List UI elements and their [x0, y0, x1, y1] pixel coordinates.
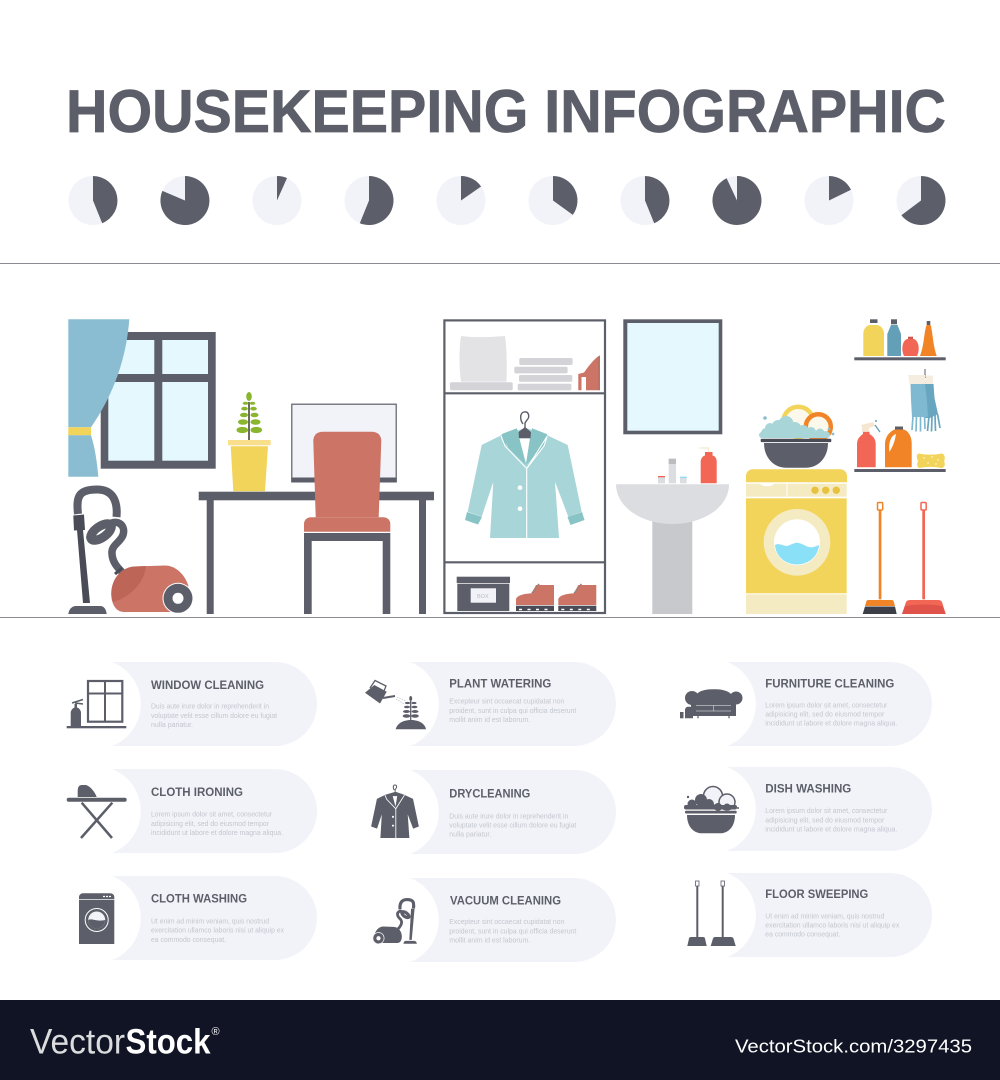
logo: ®	[212, 1026, 220, 1038]
card: vacuum cleaning	[373, 878, 616, 962]
body text: nulla pariatur.	[449, 830, 491, 839]
bathroom mirror	[623, 319, 722, 434]
heading: FLOOR SWEEPING	[765, 887, 868, 901]
shelf with bottles	[854, 319, 946, 360]
pie 9	[804, 176, 854, 225]
body text: exercitation ullamco laboris nisi ut aliquip ex	[151, 926, 284, 935]
washing machine	[746, 469, 847, 614]
pie chart row	[68, 176, 946, 225]
folded linen and iron	[450, 336, 600, 390]
desk	[199, 492, 434, 614]
body text: Ut enim ad minim veniam, quis nostrud	[765, 911, 884, 920]
image id: VectorStock.com/3297435	[735, 1036, 972, 1057]
dustpan	[902, 502, 946, 614]
body text	[765, 700, 897, 728]
body text: incididunt ut labore et dolore magna aliqua.	[151, 828, 283, 837]
logo: Stock	[126, 1022, 211, 1061]
heading: CLOTH WASHING	[151, 891, 247, 905]
body text: incididunt ut labore et dolore magna aliqua.	[765, 824, 897, 833]
icon: ironing board	[67, 785, 127, 838]
icon: sofa and bottles	[680, 689, 742, 718]
heading: PLANT WATERING	[449, 676, 551, 690]
icon: washing machine	[79, 893, 114, 944]
curtain	[68, 319, 129, 477]
pie 8	[712, 176, 762, 225]
title: HOUSEKEEPING INFOGRAPHIC	[66, 78, 946, 145]
heading: DRYCLEANING	[449, 786, 530, 800]
body text: mollit anim id est laborum.	[449, 935, 530, 944]
body text: voluptate velit esse cillum dolore eu fugiat	[151, 711, 277, 720]
jacket on hanger	[465, 412, 584, 538]
body text	[765, 911, 900, 939]
body text	[151, 916, 284, 944]
heading: DISH WASHING	[765, 782, 851, 796]
pie 7	[620, 176, 670, 225]
body text: Lorem ipsum dolor sit amet, consectetur	[765, 700, 888, 709]
card: dish washing	[684, 767, 932, 851]
sink	[616, 448, 729, 614]
storage box: BOX	[477, 594, 489, 600]
body text	[151, 810, 283, 837]
body text: adipisicing elit, sed do eiusmod tempor	[765, 710, 885, 719]
dish bowl with foam	[759, 407, 834, 468]
body text: mollit anim id est laborum.	[449, 715, 530, 724]
boots	[516, 584, 596, 611]
body text	[449, 917, 576, 944]
pie 5	[436, 176, 486, 225]
body text: Excepteur sint occaecat cupidatat non	[449, 917, 564, 926]
body text	[449, 811, 576, 839]
pie 1	[68, 176, 118, 225]
footer bar	[0, 1000, 1000, 1080]
heading: CLOTH IRONING	[151, 785, 243, 799]
vacuum cleaner	[68, 490, 194, 614]
body text: Excepteur sint occaecat cupidatat non	[449, 697, 564, 706]
card: window cleaning	[67, 662, 317, 746]
panel: room illustration	[68, 319, 946, 614]
body text: incididunt ut labore et dolore magna aliqua.	[765, 719, 897, 728]
rubber gloves	[908, 369, 940, 432]
body text: Lorem ipsum dolor sit amet, consectetur	[765, 806, 888, 815]
logo	[30, 1022, 220, 1061]
pie 6	[528, 176, 578, 225]
icon: vacuum	[373, 900, 417, 944]
pie 3	[252, 176, 302, 225]
wardrobe frame	[444, 320, 605, 613]
body text: Ut enim ad minim veniam, quis nostrud	[151, 916, 269, 925]
body text: nulla pariatur.	[151, 720, 193, 729]
body text: adipisicing elit, sed do eiusmod tempor	[151, 819, 269, 828]
body text: proident, sunt in culpa qui officia deserunt	[449, 706, 576, 715]
shelf with cleaners	[854, 420, 946, 472]
heading: WINDOW CLEANING	[151, 678, 264, 692]
computer monitor	[291, 404, 397, 482]
body text: adipisicing elit, sed do eiusmod tempor	[765, 815, 885, 824]
window	[101, 332, 216, 469]
body text: Duis aute irure dolor in reprehenderit in	[151, 702, 269, 711]
pie 4	[344, 176, 394, 225]
body text	[765, 806, 897, 833]
broom	[863, 502, 897, 614]
potted plant	[228, 392, 271, 491]
heading: VACUUM CLEANING	[450, 893, 561, 907]
body text: ea commodo consequat.	[765, 930, 840, 939]
heading: FURNITURE CLEANING	[765, 677, 894, 691]
storage box	[457, 577, 510, 611]
body text: proident, sunt in culpa qui officia deserunt	[449, 926, 576, 935]
logo: Vector	[30, 1022, 125, 1061]
card: cloth ironing	[67, 769, 317, 853]
chair	[304, 432, 390, 614]
card: furniture cleaning	[680, 662, 932, 746]
icon: watering can and plant	[365, 680, 426, 729]
card: drycleaning	[371, 770, 616, 854]
pie 10	[896, 176, 946, 225]
icon: jacket	[371, 785, 419, 838]
card: plant watering	[365, 662, 616, 746]
icon: dish bowl	[684, 786, 739, 833]
body text	[449, 697, 576, 724]
body text: Lorem ipsum dolor sit amet, consectetur	[151, 810, 272, 819]
pie 2	[160, 176, 210, 225]
body text: exercitation ullamco laboris nisi ut aliquip ex	[765, 921, 900, 930]
body text: voluptate velit esse cillum dolore eu fugiat	[449, 821, 576, 830]
body text: Duis aute irure dolor in reprehenderit in	[449, 811, 568, 820]
icon: broom and dustpan	[687, 881, 736, 946]
body text: ea commodo consequat.	[151, 935, 226, 944]
body text	[151, 702, 277, 729]
icon: window and spray	[67, 681, 126, 728]
card: cloth washing	[79, 876, 317, 960]
card: floor sweeping	[687, 873, 932, 957]
